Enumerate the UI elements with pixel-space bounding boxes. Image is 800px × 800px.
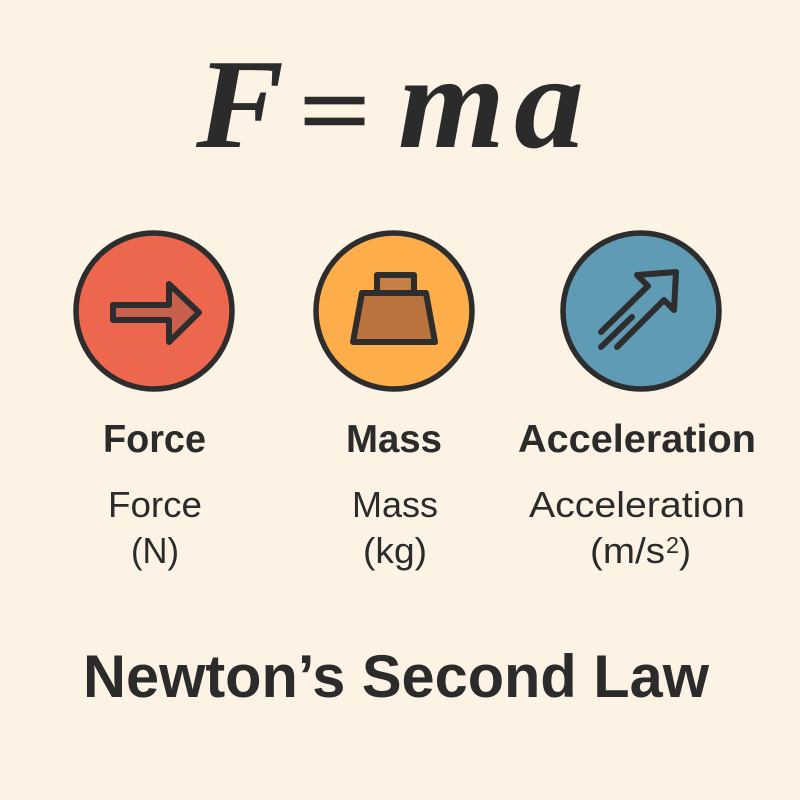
footer title: Newton’s Second Law [83,643,709,710]
text block: Mass unit [352,484,438,571]
text block: Mass unit: (kg) [363,530,427,571]
title: formula F = ma: = [300,54,369,168]
icon: acceleration circle with arrow [563,233,719,389]
text block: Acceleration unit: ) [679,530,691,571]
text block: Force unit: Force [108,484,202,525]
title: formula F = ma [195,28,584,176]
heading: Mass: Mass [346,418,442,461]
text block: Acceleration unit: 2 [666,532,679,558]
icon: force circle with arrow [76,233,232,389]
heading: Acceleration: Acceleration [518,418,756,461]
heading: Force: Force [103,418,206,461]
text block: Acceleration unit: (m/s [590,530,665,571]
title: formula F = ma: F [195,33,284,175]
text block: Acceleration unit: Acceleration [529,484,745,525]
text block: Acceleration unit [529,484,745,571]
text block: Force unit: (N) [131,530,179,571]
text block: Mass unit: Mass [352,484,438,525]
icon: mass circle with weight [316,233,472,389]
title: formula F = ma: a [514,28,584,176]
title: formula F = ma: m [398,28,505,176]
text block: Force unit [108,484,202,571]
